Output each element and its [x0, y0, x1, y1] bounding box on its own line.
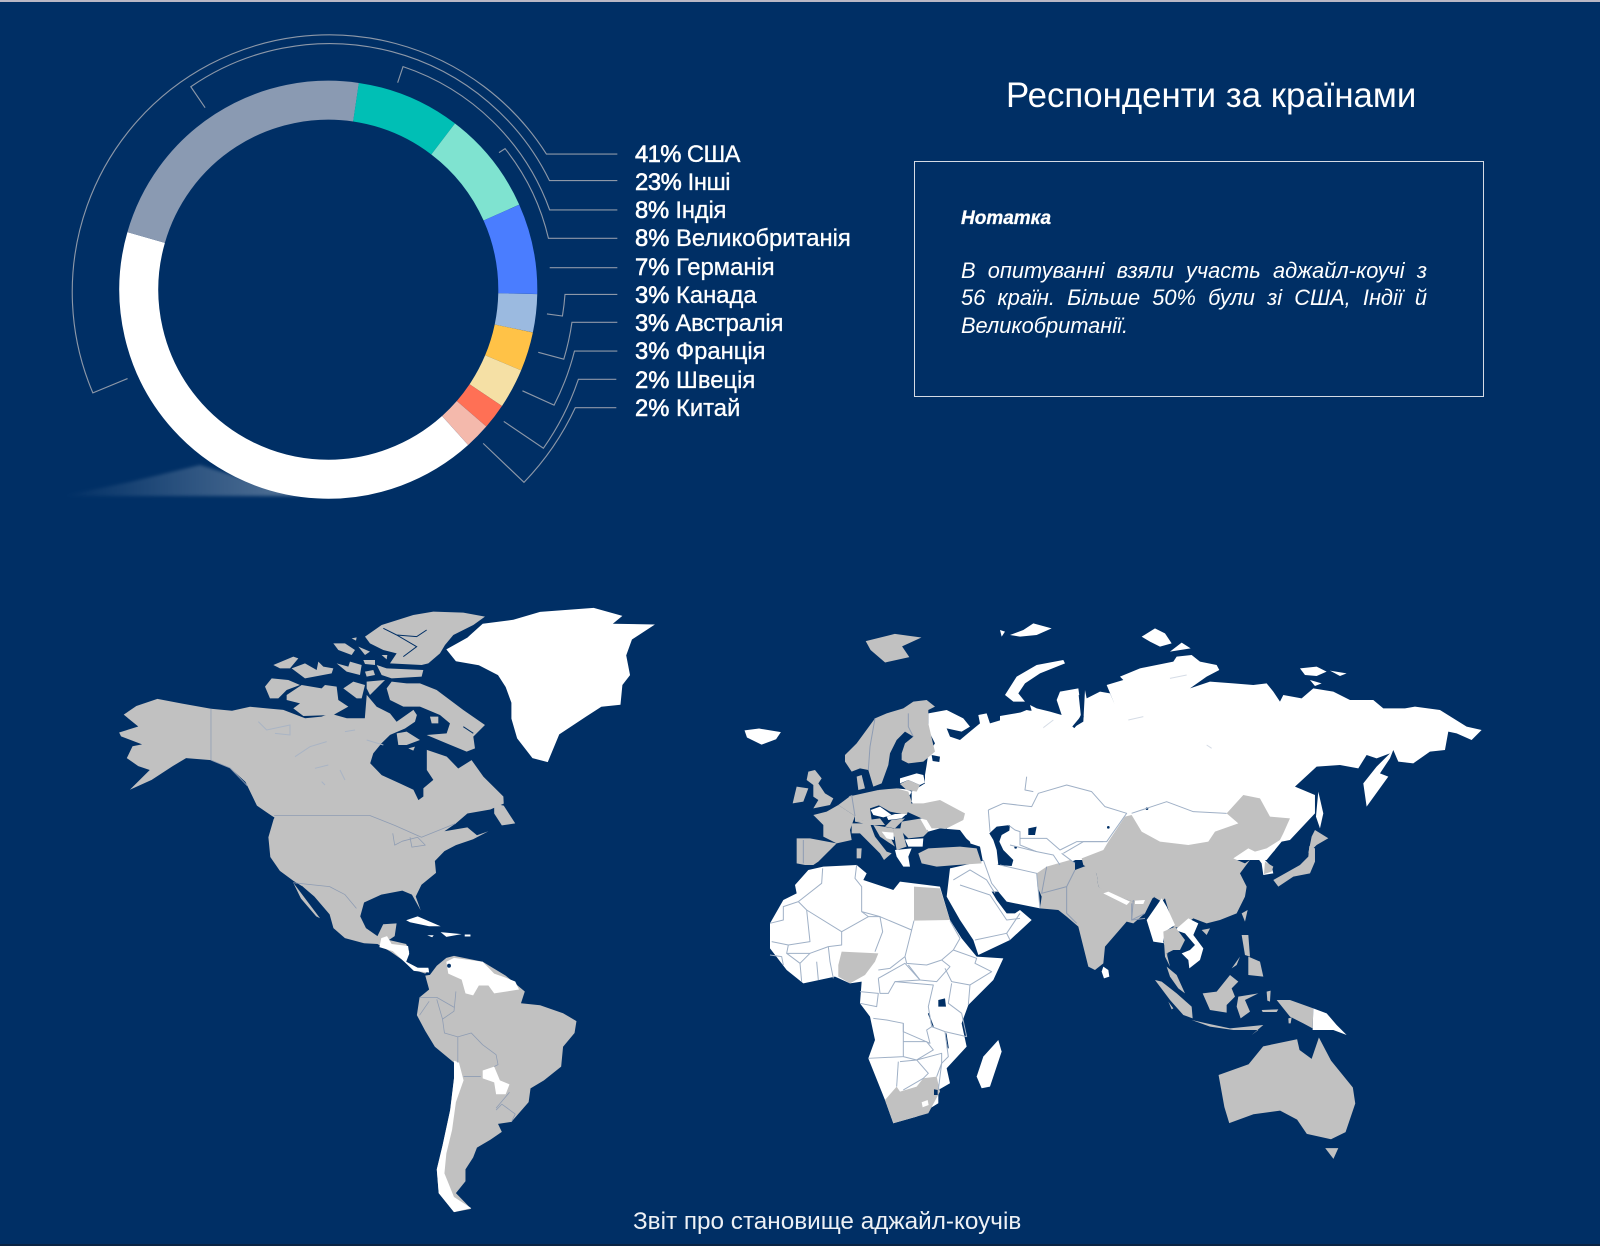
map: Canadian Arctic	[258, 612, 485, 785]
map: Russia and north Asia (white)	[1000, 623, 1482, 860]
note text	[961, 258, 1427, 338]
Sumatra	[1155, 980, 1193, 1018]
Italy	[852, 823, 892, 860]
Venezuela and Guianas (white)	[446, 958, 519, 995]
map: Asia grey countries and borders	[953, 777, 1290, 978]
France	[813, 805, 855, 843]
Germany and Benelux	[838, 790, 880, 822]
Ireland	[793, 787, 808, 803]
South Asia	[1037, 860, 1165, 970]
Nordic countries	[845, 700, 935, 787]
map: Africa	[770, 865, 1003, 1123]
Ukraine	[907, 800, 965, 828]
Tasmania	[1325, 1148, 1338, 1159]
United Kingdom	[807, 770, 833, 808]
map: European Russia (white)	[897, 710, 1043, 867]
Serbia	[893, 828, 907, 850]
Romania	[900, 818, 928, 838]
legend item: India: 8% Індія	[635, 197, 726, 224]
legend item: Canada: 3% Канада	[635, 282, 757, 309]
map: Europe (grey)	[793, 700, 982, 867]
map: Black Sea and lakes	[923, 755, 972, 848]
Taiwan	[1242, 910, 1248, 922]
legend item: France: 3% Франція	[635, 338, 766, 365]
legend	[635, 141, 851, 422]
note heading: Нотатка	[961, 208, 1051, 229]
legend item: China: 2% Китай	[635, 395, 740, 422]
Austria	[855, 818, 885, 825]
donut shadow	[62, 465, 300, 496]
Greenland	[446, 608, 655, 762]
legend item: Germany: 7% Германія	[635, 254, 775, 281]
leader lines	[72, 35, 617, 482]
Borneo	[1203, 975, 1238, 1013]
Chile (white)	[437, 1061, 471, 1212]
white Balkan and central countries	[871, 807, 932, 867]
borders: Americas	[211, 709, 515, 1122]
New Guinea	[1277, 1000, 1347, 1035]
note panel	[914, 161, 1484, 397]
note text: 56 країн. Більше 50% були зі США, Індії й	[961, 285, 1427, 310]
Denmark	[857, 775, 865, 790]
Poland	[878, 788, 912, 815]
Spain and Portugal	[797, 838, 837, 865]
donut chart	[72, 34, 618, 499]
legend item: USA: 41% США	[635, 141, 740, 168]
South Korea	[1264, 862, 1273, 874]
legend item: Australia: 3% Австралія	[635, 310, 783, 337]
top edge strip	[0, 0, 1600, 2]
Paraguay (white)	[483, 1067, 509, 1094]
legend item: Sweden: 2% Швеція	[635, 367, 755, 394]
Thailand	[1163, 927, 1185, 967]
Iceland	[745, 729, 781, 745]
Australia	[1219, 1037, 1355, 1139]
Malaysia	[1167, 967, 1185, 993]
Sardinia	[857, 848, 862, 858]
map: Middle East and south Asia base (white)	[947, 807, 1148, 955]
South America	[417, 956, 576, 1212]
map: Americas	[119, 608, 655, 1212]
Sulawesi	[1237, 993, 1258, 1018]
footer caption: Звіт про становище аджайл-коучів	[633, 1208, 1021, 1235]
Lake Maracaibo	[447, 964, 451, 968]
Balkans west	[873, 825, 895, 847]
border: India Myanmar	[1132, 900, 1145, 920]
Nepal	[1103, 892, 1130, 905]
Philippines	[1232, 935, 1263, 977]
map: Southeast Asia	[1132, 846, 1347, 1035]
legend item: other: 23% Інші	[635, 169, 730, 196]
Hainan	[1202, 928, 1210, 935]
borders: Europe	[803, 713, 913, 863]
map: Hokkaido	[1308, 830, 1328, 853]
North America	[119, 695, 515, 974]
donut ring	[61, 22, 596, 557]
Central America and Caribbean (white)	[379, 916, 470, 972]
Hungary	[885, 818, 905, 828]
Bhutan	[1135, 900, 1145, 904]
Sri Lanka	[1102, 967, 1109, 978]
bottom edge strip	[0, 1244, 1600, 1246]
Svalbard	[866, 634, 921, 662]
note text: Великобританії.	[961, 313, 1128, 338]
note text: В опитуванні взяли участь аджайл-коучі з	[961, 258, 1427, 283]
Japan Honshu and Kyushu	[1273, 846, 1315, 887]
Turkey	[918, 847, 982, 867]
Indonesian small islands	[1168, 991, 1292, 1023]
North Korea	[1257, 843, 1277, 875]
Myanmar	[1147, 898, 1175, 957]
title: Респонденти за країнами	[1006, 76, 1416, 115]
China	[1082, 795, 1290, 928]
Java and lesser islands	[1192, 1020, 1263, 1035]
legend item: UK: 8% Великобританія	[635, 225, 851, 252]
map: Iceland, Svalbard, Australia	[745, 634, 1355, 1159]
Latvia	[900, 780, 920, 792]
Laos Vietnam Cambodia	[1175, 918, 1203, 968]
